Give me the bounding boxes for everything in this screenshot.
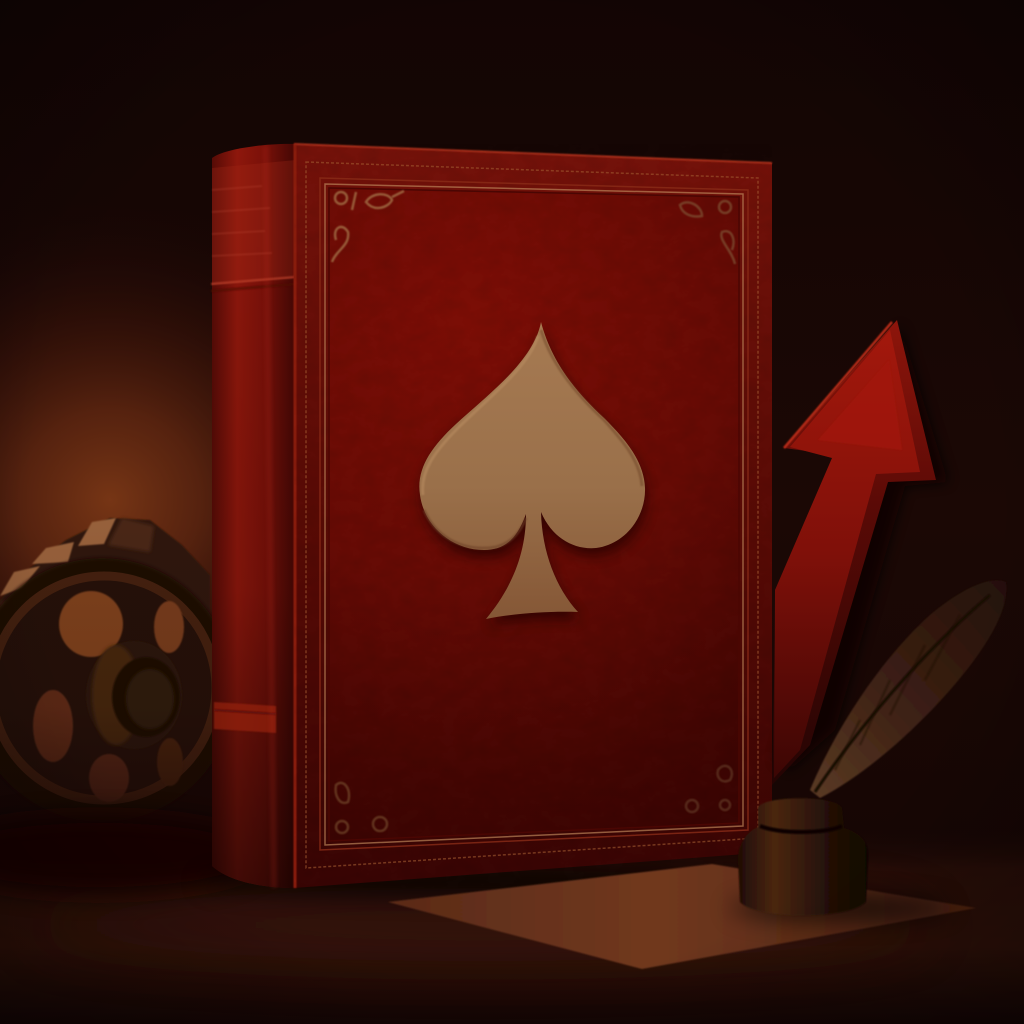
book spine: [211, 144, 296, 888]
table surface: [0, 830, 1024, 1024]
wheel lower shade: [0, 520, 212, 860]
lower band: [214, 702, 276, 733]
icon: red up arrow: [772, 320, 948, 785]
book: [211, 144, 772, 888]
corner ornament: bottom right: [686, 766, 732, 812]
wheel holes: [59, 591, 123, 657]
corner ornament: top right: [680, 201, 735, 264]
corner ornament: top left: [332, 191, 404, 262]
gold borders: [306, 162, 758, 868]
book shadow: [200, 868, 780, 896]
cover panel: [328, 187, 740, 842]
top band: [212, 160, 296, 285]
wheel body: [0, 558, 234, 822]
wheel hub: [86, 641, 182, 749]
arrow face: [774, 330, 920, 778]
quill feather: [810, 580, 1006, 798]
corner ornament: bottom left: [336, 783, 387, 833]
paper sheet: [388, 864, 976, 969]
arrow side face: [772, 320, 936, 785]
gear teeth: [0, 518, 210, 650]
inkwell: [730, 798, 950, 920]
icon: gear wheel: [0, 518, 270, 895]
icon: embossed spade: [419, 322, 647, 626]
book cover: [294, 144, 772, 888]
